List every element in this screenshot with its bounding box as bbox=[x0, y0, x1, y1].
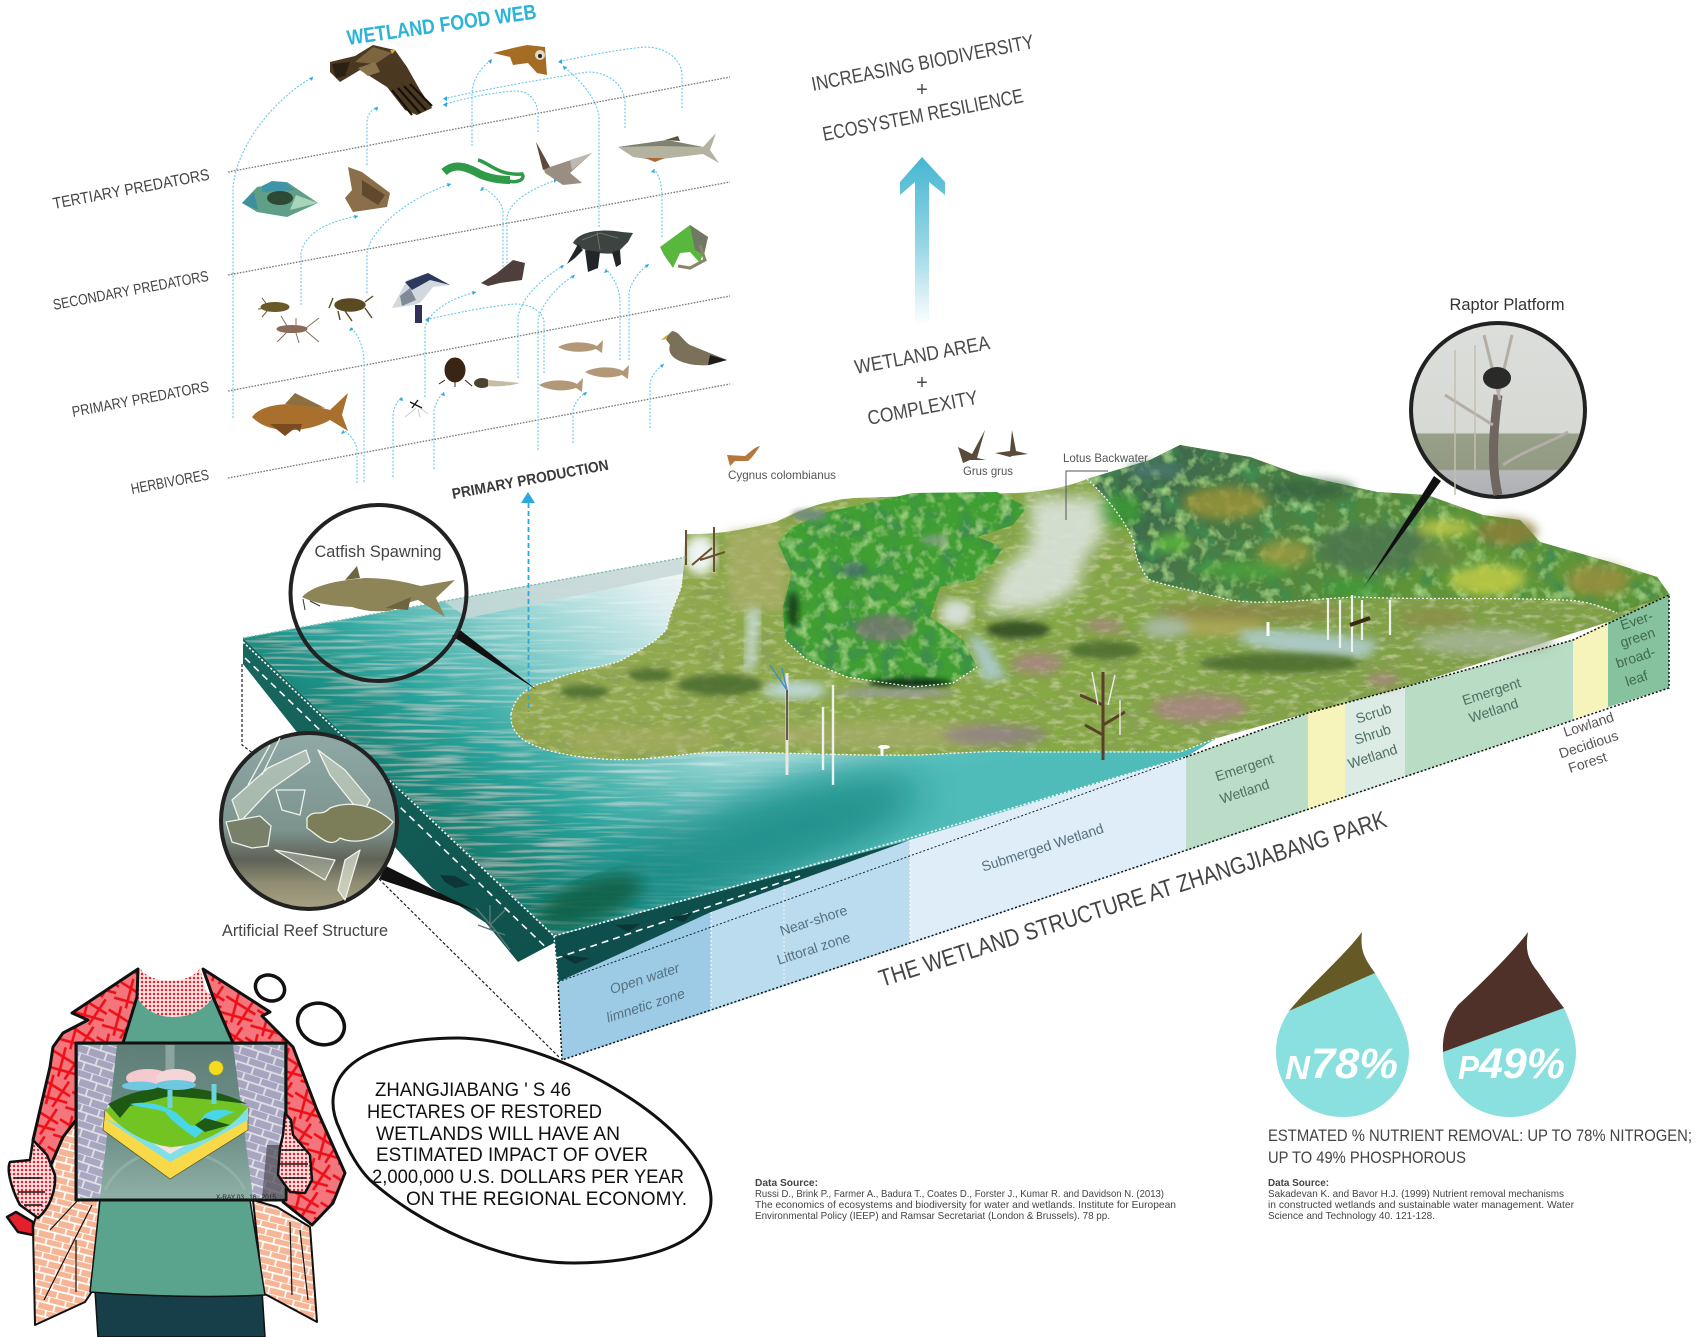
animal: small fish two bbox=[585, 365, 629, 379]
animal: toad bbox=[345, 167, 390, 212]
heading: increasing biodiversity: INCREASING BIODIVERSITY bbox=[810, 31, 1036, 96]
nutrient removal caption bbox=[1268, 1126, 1692, 1167]
speech bubble: WETLANDS WILL HAVE AN bbox=[376, 1123, 620, 1145]
animal: crayfish bbox=[329, 296, 373, 321]
zone label: open water: limnetic zone bbox=[604, 985, 687, 1025]
callout: lotus backwater: Lotus Backwater bbox=[1063, 451, 1148, 465]
right jacket lower bbox=[253, 1200, 317, 1322]
zone label: emergent wetland: Emergent bbox=[1213, 750, 1276, 784]
catfish label: Catfish Spawning bbox=[314, 542, 442, 561]
mini sun bbox=[209, 1061, 223, 1075]
animal: small fish three bbox=[539, 378, 583, 392]
zone label: evergreen broadleaf: green bbox=[1618, 624, 1657, 650]
lotus backwater and channels bbox=[684, 497, 1377, 699]
zone label: near-shore littoral: Littoral zone bbox=[775, 929, 852, 968]
animal: small fish one bbox=[558, 340, 603, 353]
forest colour patches bbox=[1098, 463, 1630, 597]
data source: nutrient removal: Sakadevan K. and Bavor H.J. (1999) Nutrient removal mechanisms bbox=[1268, 1188, 1564, 1200]
zone label: lowland deciduous forest: Forest bbox=[1566, 748, 1609, 776]
zone: emergent two bbox=[1405, 640, 1573, 777]
zone label: scrub shrub wetland bbox=[1346, 700, 1399, 772]
species: grus grus bbox=[958, 430, 1028, 478]
zone label: evergreen broadleaf: leaf bbox=[1623, 667, 1650, 689]
arrow: increasing upward bbox=[900, 157, 945, 325]
heading: complexity: COMPLEXITY bbox=[866, 387, 980, 430]
speech bubble: ZHANGJIABANG ' S 46 bbox=[375, 1079, 571, 1101]
right jacket upper bbox=[203, 969, 345, 1225]
animal: nymph bbox=[277, 316, 319, 343]
level label: primary production: PRIMARY PRODUCTION bbox=[451, 457, 610, 503]
droplet: nitrogen: N bbox=[1285, 1049, 1311, 1086]
droplet: phosphorus: 49% bbox=[1478, 1040, 1565, 1088]
miniature wetland block bbox=[103, 1087, 248, 1179]
reef structure fish bbox=[226, 738, 393, 900]
jacket fold lines bbox=[44, 1200, 308, 1300]
land base bbox=[511, 445, 1670, 760]
zone label: open water bbox=[604, 959, 687, 1025]
zone label: submerged wetland: Submerged Wetland bbox=[979, 820, 1105, 875]
side wall of water block bbox=[243, 638, 910, 982]
zone label: emergent wetland two: Wetland bbox=[1467, 695, 1520, 726]
left jacket upper bbox=[33, 969, 138, 1167]
thought ring large bbox=[291, 996, 351, 1052]
forest island details bbox=[787, 510, 952, 688]
animal: tadpole bbox=[474, 378, 520, 388]
animal: hawk bbox=[536, 142, 592, 185]
animal: eagle bbox=[330, 45, 432, 115]
data source: nutrient removal: Data Source: bbox=[1268, 1177, 1329, 1189]
food web arrows bbox=[233, 47, 682, 483]
zone label: near-shore littoral bbox=[775, 902, 852, 968]
zone strip bbox=[558, 595, 1669, 1060]
heading: ecosystem resilience: ECOSYSTEM RESILIENCE bbox=[821, 85, 1025, 146]
left hand bbox=[9, 1140, 55, 1218]
zone: transition two bbox=[1573, 622, 1608, 720]
animal: mosquito bbox=[405, 400, 428, 417]
raptor platform label: Raptor Platform bbox=[1450, 296, 1564, 314]
zone label: evergreen broadleaf: Ever- bbox=[1618, 607, 1655, 633]
zone label: lowland deciduous forest: Lowland bbox=[1561, 709, 1616, 740]
right hand bbox=[278, 1113, 312, 1193]
central forest island bbox=[778, 492, 1027, 687]
shrubs on the marsh bbox=[561, 621, 1360, 699]
zone: transition one bbox=[1308, 702, 1345, 810]
animal: carp bbox=[252, 393, 348, 436]
data source: nutrient removal: in constructed wetlands and sustainable water management. Water bbox=[1268, 1199, 1574, 1211]
animal: green snake bbox=[444, 160, 523, 182]
droplet: phosphorus bbox=[1443, 932, 1576, 1117]
callout: raptor platform bbox=[1364, 296, 1585, 587]
level label: secondary predators: SECONDARY PREDATORS bbox=[52, 268, 210, 314]
animal: insect larva bbox=[258, 298, 289, 317]
callout: artificial reef structure bbox=[221, 733, 478, 940]
data source: economics: Russi D., Brink P., Farmer A., Badura T., Coates D., Forster J., Kumar R. and Davidson N. (2013) bbox=[755, 1188, 1164, 1200]
neck bbox=[137, 968, 213, 1017]
zone label: emergent wetland two: Emergent bbox=[1460, 674, 1523, 708]
zone: scrub shrub bbox=[1345, 687, 1405, 798]
zone label: near-shore littoral: Near-shore bbox=[778, 902, 849, 939]
zone label: emergent wetland bbox=[1213, 750, 1276, 807]
zone label: lowland deciduous forest bbox=[1557, 709, 1620, 776]
animal: green frog bbox=[660, 225, 708, 268]
animal: water beetle bbox=[439, 358, 472, 387]
droplet: phosphorus: P bbox=[1458, 1049, 1480, 1086]
thought ring small bbox=[251, 970, 289, 1006]
panel: wetland block model bbox=[242, 430, 1670, 1060]
callout: catfish spawning bbox=[290, 505, 537, 690]
data source: nutrient removal bbox=[1268, 1177, 1574, 1222]
animal: bat bbox=[481, 260, 525, 286]
zone label: open water: Open water bbox=[608, 959, 683, 997]
plus sign top: + bbox=[916, 79, 928, 101]
animal: marten bbox=[493, 45, 547, 75]
animal: silver fish bbox=[618, 133, 719, 163]
arrow: primary production bbox=[521, 492, 535, 712]
zone: emergent one bbox=[1186, 713, 1308, 851]
species: cygnus colombianus: Cygnus colombianus bbox=[728, 468, 836, 482]
plus sign bottom: + bbox=[916, 372, 928, 394]
jeans bbox=[95, 1290, 265, 1337]
front and side edges bbox=[242, 557, 1669, 1060]
zone label: evergreen broadleaf: broad- bbox=[1614, 643, 1657, 671]
level label: herbivores: HERBIVORES bbox=[130, 467, 210, 498]
zone label: scrub shrub wetland: Shrub bbox=[1352, 721, 1393, 748]
zone label: emergent wetland two bbox=[1460, 674, 1523, 726]
water surface bbox=[244, 574, 1216, 936]
t-shirt bbox=[90, 997, 265, 1296]
panel: wetland food web bbox=[52, 1, 730, 503]
reed grasses bbox=[560, 525, 1555, 752]
panel: nutrient removal bbox=[1268, 932, 1692, 1222]
heading: wetland area: WETLAND AREA bbox=[853, 332, 992, 379]
x-ray sheet bbox=[76, 1043, 286, 1201]
left jacket lower bbox=[33, 1120, 100, 1325]
zone: near-shore bbox=[711, 840, 910, 1011]
data source: economics: Data Source: bbox=[755, 1177, 818, 1189]
zone label: evergreen broadleaf bbox=[1614, 607, 1657, 689]
level label: tertiary predators: TERTIARY PREDATORS bbox=[52, 167, 211, 213]
zone: submerged bbox=[910, 757, 1186, 944]
wetland shoreline outline bbox=[511, 479, 1617, 760]
species: grus grus: Grus grus bbox=[963, 464, 1013, 478]
speech bubble: 2,000,000 U.S. DOLLARS PER YEAR bbox=[372, 1166, 684, 1188]
data source: economics bbox=[755, 1177, 1176, 1222]
callout: lotus backwater bbox=[1063, 451, 1148, 520]
species: cygnus colombianus bbox=[727, 446, 836, 482]
droplet: nitrogen bbox=[1276, 932, 1409, 1117]
data source: economics: Environmental Policy (IEEP) and Ramsar Secretariat (London & Brussels). 78 pp. bbox=[755, 1210, 1110, 1222]
animal: turtle bbox=[567, 230, 633, 272]
animal: heron bbox=[392, 273, 450, 323]
zone label: scrub shrub wetland: Scrub bbox=[1354, 700, 1394, 727]
panel: person holding x-ray bbox=[7, 968, 345, 1337]
dead trees and poles bbox=[686, 527, 1390, 785]
panel: biodiversity trend bbox=[810, 31, 1036, 430]
zone: open water bbox=[558, 912, 711, 1060]
animal: duck bbox=[661, 331, 727, 365]
zone label: lowland deciduous forest: Decidious bbox=[1557, 727, 1620, 761]
zone label: emergent wetland: Wetland bbox=[1218, 776, 1271, 807]
left cuff bbox=[7, 1212, 33, 1235]
nutrient removal caption: UP TO 49% PHOSPHOROUS bbox=[1268, 1148, 1466, 1167]
level label: primary predators: PRIMARY PREDATORS bbox=[71, 378, 210, 421]
data source: economics: The economics of ecosystems and biodiversity for water and wetlands. Institute for European bbox=[755, 1199, 1176, 1211]
speech bubble bbox=[333, 1038, 711, 1263]
catfish image bbox=[302, 566, 455, 617]
zone: evergreen bbox=[1608, 595, 1669, 707]
hill forest bbox=[1087, 445, 1670, 613]
speech bubble: ESTIMATED IMPACT OF OVER bbox=[376, 1144, 648, 1166]
structure title: THE WETLAND STRUCTURE AT ZHANGJIABANG PARK bbox=[876, 806, 1390, 993]
animal: rock fish bbox=[242, 181, 318, 217]
speech bubble: ON THE REGIONAL ECONOMY. bbox=[406, 1188, 687, 1210]
droplet: nitrogen: 78% bbox=[1311, 1040, 1398, 1088]
x-ray date: X-RAY 03 . 16 . 2015 bbox=[216, 1194, 276, 1201]
tree and bird bbox=[1445, 335, 1568, 495]
pink marsh flowers bbox=[943, 620, 1400, 745]
data source: nutrient removal: Science and Technology 40. 121-128. bbox=[1268, 1210, 1435, 1222]
mini clouds bbox=[122, 1069, 214, 1108]
speech bubble: HECTARES OF RESTORED bbox=[367, 1101, 602, 1123]
reef label: Artificial Reef Structure bbox=[222, 921, 388, 940]
silhouettes in water section bbox=[440, 875, 692, 964]
zone label: scrub shrub wetland: Wetland bbox=[1346, 741, 1399, 772]
